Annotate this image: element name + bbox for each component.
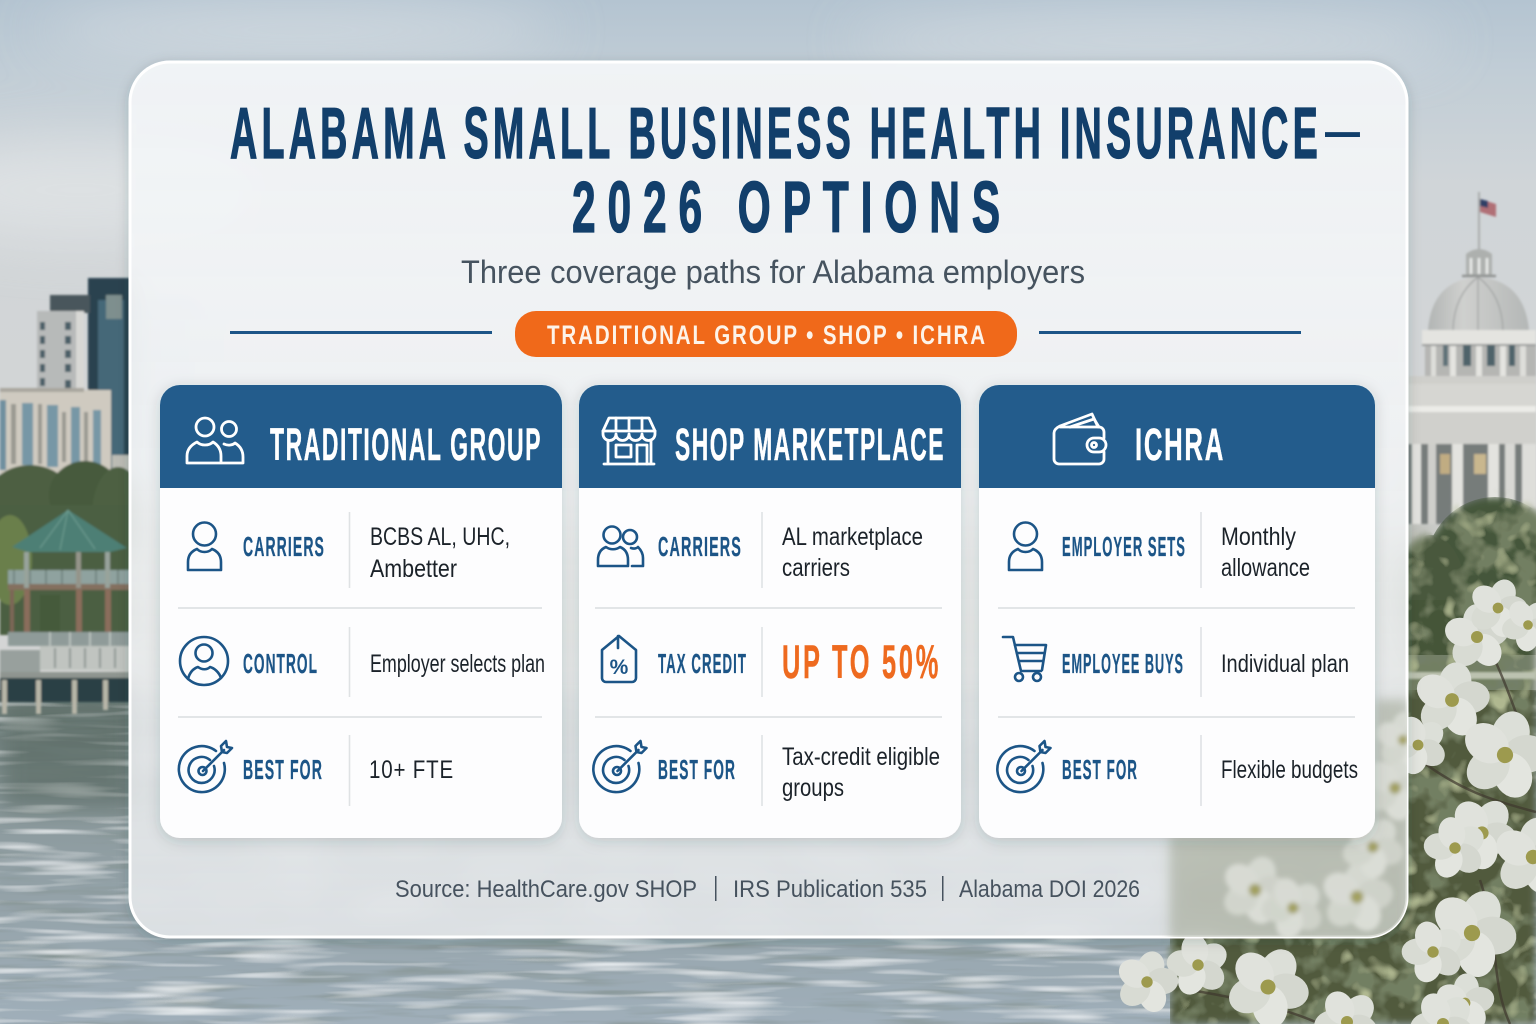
row: carriers: CARRIERS (243, 531, 325, 562)
row: employer sets: allowance (1221, 554, 1310, 582)
icon: wallet (1054, 414, 1106, 464)
title (230, 89, 1361, 248)
row: control: Employer selects plan (370, 650, 545, 678)
row: best for: BEST FOR (1062, 754, 1138, 785)
title: 2026 OPTIONS (572, 168, 1012, 248)
row: best for: groups (782, 774, 844, 802)
header: shop marketplace (579, 385, 961, 488)
source line: Alabama DOI 2026 (959, 876, 1140, 903)
row: employee buys: EMPLOYEE BUYS (1062, 648, 1184, 679)
row: employee buys: Individual plan (1221, 650, 1349, 678)
row: best for: 10+ FTE (369, 756, 454, 784)
row: control: CONTROL (243, 648, 318, 679)
row: carriers: CARRIERS (658, 531, 742, 562)
row: carriers: Ambetter (370, 555, 457, 583)
row: tax credit (602, 627, 941, 697)
row: best for: Flexible budgets (1221, 756, 1358, 784)
main translucent panel (124, 58, 1414, 946)
row: best for (179, 735, 454, 806)
orange pill: traditional group, shop, ICHRA: TRADITIONAL GROUP • SHOP • ICHRA (547, 320, 987, 350)
source line: IRS Publication 535 (733, 876, 927, 903)
title: – (1325, 89, 1361, 169)
row: best for: Tax-credit eligible (782, 743, 940, 771)
row: best for (593, 735, 940, 806)
row: employer sets: Monthly (1221, 523, 1296, 551)
header: traditional group (160, 385, 562, 488)
panel: shop marketplace (579, 385, 961, 838)
row: carriers (188, 512, 510, 588)
row: best for (997, 735, 1358, 806)
trees and dogwood branches on the right (1170, 497, 1536, 1024)
icon: storefront (603, 418, 655, 464)
row: tax credit: % (610, 656, 629, 679)
subtitle: Three coverage paths for Alabama employers (461, 254, 1085, 290)
divider line left (230, 331, 492, 334)
source line (395, 876, 1140, 903)
source line: Source: HealthCare.gov SHOP (395, 876, 697, 903)
icon: people (187, 418, 243, 463)
row: tax credit: UP TO 50% (782, 635, 941, 688)
orange pill: traditional group, shop, ICHRA (515, 311, 1017, 357)
row: carriers (598, 512, 923, 588)
row: best for: BEST FOR (658, 754, 736, 785)
row: tax credit: TAX CREDIT (658, 648, 747, 679)
row: employer sets: EMPLOYER SETS (1062, 531, 1186, 562)
header: traditional group: TRADITIONAL GROUP (270, 419, 542, 470)
header: ICHRA: ICHRA (1135, 419, 1225, 470)
row: carriers: AL marketplace (782, 523, 923, 551)
row: carriers: BCBS AL, UHC, (370, 523, 510, 551)
panel: ICHRA (979, 385, 1375, 838)
row: control (180, 627, 545, 697)
row: best for: BEST FOR (243, 754, 323, 785)
header: ICHRA (979, 385, 1375, 488)
row: employer sets (1009, 512, 1310, 588)
divider line right (1039, 331, 1301, 334)
panel: traditional group (160, 385, 562, 838)
header: shop marketplace: SHOP MARKETPLACE (675, 419, 945, 470)
row: carriers: carriers (782, 554, 850, 582)
row: employee buys (1003, 627, 1349, 697)
